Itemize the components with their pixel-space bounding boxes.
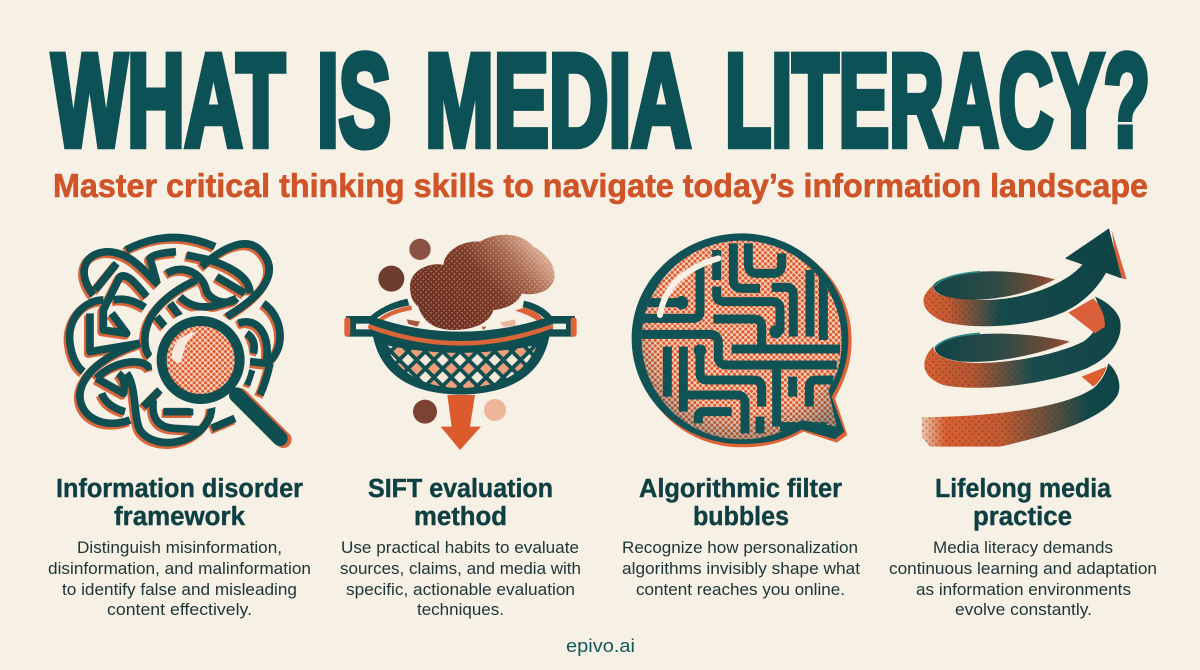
title: WHAT	[52, 26, 285, 174]
panel: algorithmic filter bubbles	[622, 233, 860, 599]
body text	[622, 539, 860, 599]
panel: lifelong media practice	[889, 228, 1157, 619]
heading: bubbles	[693, 503, 789, 531]
body text: Media literacy demands	[933, 539, 1113, 557]
body text	[889, 539, 1157, 619]
title	[52, 26, 1150, 174]
body text: disinformation, and malinformation	[48, 560, 311, 578]
body text: to identify false and misleading	[62, 581, 297, 599]
heading: practice	[973, 503, 1072, 531]
body text: content effectively.	[107, 601, 252, 619]
panel: SIFT evaluation	[340, 235, 581, 619]
heading: Information disorder	[56, 475, 303, 503]
footer brand: epivo.ai	[566, 636, 635, 656]
body text: continuous learning and adaptation	[889, 560, 1157, 578]
icon: strainer filtering cloud	[344, 235, 577, 450]
body text	[48, 539, 311, 619]
body text: content reaches you online.	[636, 581, 845, 599]
heading	[368, 475, 553, 531]
heading: Lifelong media	[935, 475, 1112, 503]
heading	[639, 475, 842, 531]
body text: Use practical habits to evaluate	[341, 539, 579, 557]
body text: evolve constantly.	[955, 601, 1092, 619]
heading	[56, 475, 303, 531]
heading: method	[414, 503, 507, 531]
body text: specific, actionable evaluation	[346, 581, 575, 599]
icon: tangled knot with magnifying glass	[68, 237, 283, 445]
body text: as information environments	[916, 581, 1131, 599]
heading: framework	[114, 503, 246, 531]
heading: SIFT evaluation	[368, 475, 553, 503]
heading: Algorithmic filter	[639, 475, 842, 503]
subtitle: Master critical thinking skills to navigate today’s information landscape	[53, 167, 1148, 204]
icon: speech bubble with circuit maze	[632, 233, 852, 447]
body text	[340, 539, 581, 619]
body text: Distinguish misinformation,	[77, 539, 282, 557]
body text: techniques.	[417, 601, 504, 619]
icon: upward spiral arrow	[922, 228, 1127, 447]
body text: sources, claims, and media with	[340, 560, 581, 578]
panel: information disorder	[48, 237, 311, 619]
body text: algorithms invisibly shape what	[622, 560, 860, 578]
heading	[935, 475, 1112, 531]
title: MEDIA	[425, 26, 691, 174]
title: IS	[317, 26, 391, 174]
body text: Recognize how personalization	[622, 539, 858, 557]
arrow down	[441, 395, 481, 450]
